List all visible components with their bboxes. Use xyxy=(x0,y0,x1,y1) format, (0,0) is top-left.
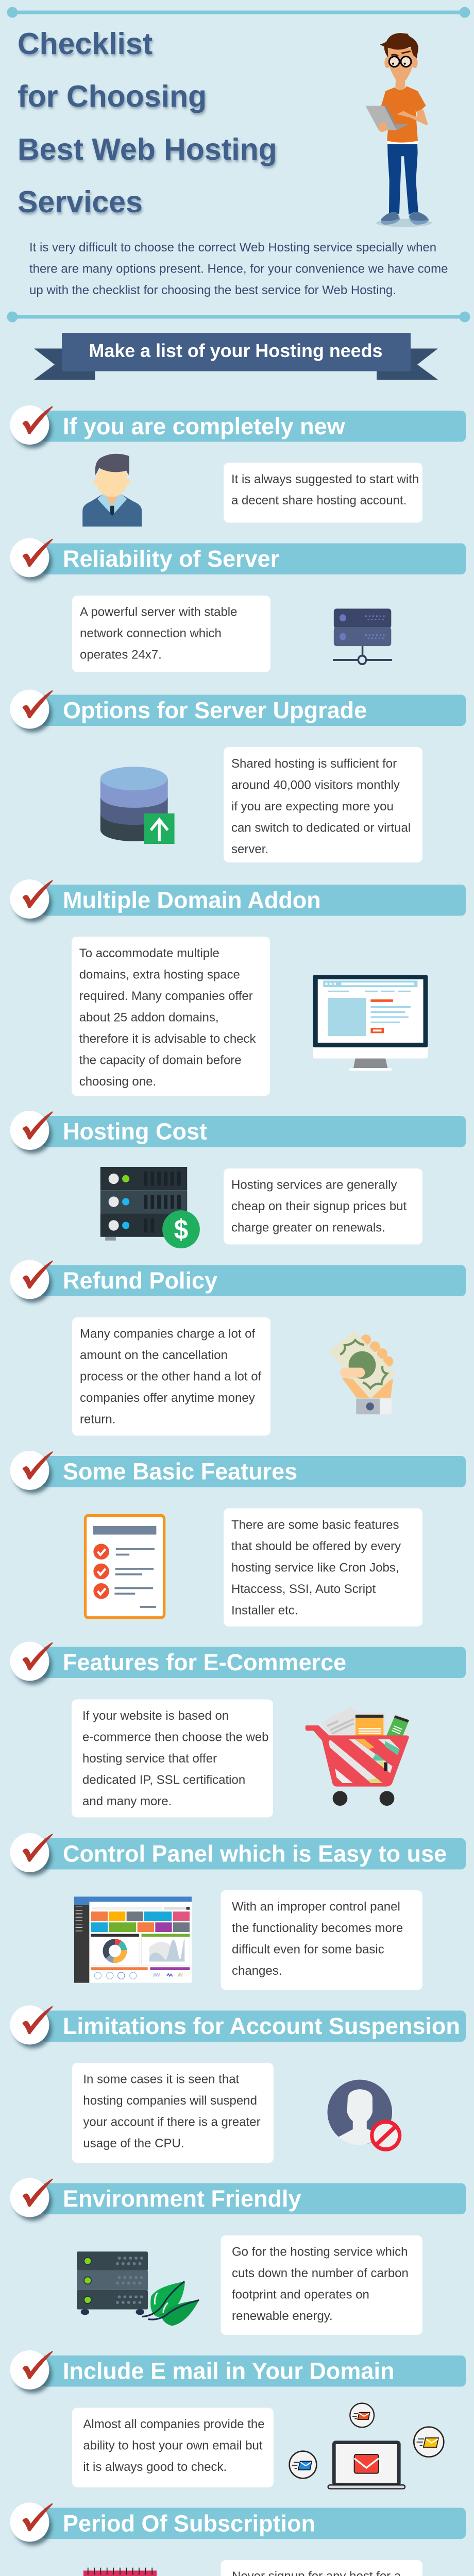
card: email: it is always good to check. xyxy=(83,2460,227,2474)
card: environment: Go for the hosting service which xyxy=(232,2245,408,2259)
icon: dashboard screenshot xyxy=(74,1896,192,1983)
card: suspension: usage of the CPU. xyxy=(83,2137,184,2150)
card: upgrade xyxy=(224,747,422,862)
card: domains: domains, extra hosting space xyxy=(79,968,240,982)
section 13 header: Period Of Subscription xyxy=(63,2510,315,2537)
intro paragraph: up with the checklist for choosing the best service for Web Hosting. xyxy=(29,283,396,297)
card: refund: Many companies charge a lot of xyxy=(80,1327,256,1341)
icon: server with dollar: $ xyxy=(174,1214,188,1245)
card: email xyxy=(72,2408,274,2487)
card: cost xyxy=(224,1168,422,1245)
card: email: Almost all companies provide the xyxy=(83,2417,265,2431)
section 2 header: Reliability of Server xyxy=(63,546,279,572)
card: suspension: your account if there is a greater xyxy=(83,2115,261,2129)
title: Best Web Hosting xyxy=(18,132,277,166)
icon: hand with money xyxy=(329,1331,396,1414)
card: environment: renewable energy. xyxy=(232,2309,333,2323)
section 8 header xyxy=(10,1641,466,1685)
card: domains: To accommodate multiple xyxy=(79,946,219,960)
card: suspension: In some cases it is seen that xyxy=(83,2072,240,2087)
icon: server with dollar xyxy=(100,1167,200,1248)
card: refund: process or the other hand a lot of xyxy=(80,1369,262,1384)
card: domains: about 25 addon domains, xyxy=(79,1011,219,1024)
card: cost: cheap on their signup prices but xyxy=(231,1199,407,1213)
section 5 header: Hosting Cost xyxy=(63,1118,207,1145)
card: upgrade: Shared hosting is sufficient for xyxy=(231,757,397,771)
section 10 header: Limitations for Account Suspension xyxy=(63,2013,460,2039)
section 3 header: Options for Server Upgrade xyxy=(63,697,367,723)
card: e-commerce: If your website is based on xyxy=(82,1709,229,1723)
divider rule xyxy=(7,311,470,323)
title: Checklist xyxy=(18,27,153,61)
card: new: a decent share hosting account. xyxy=(231,494,407,507)
intro paragraph: It is very difficult to choose the correct Web Hosting service specially when xyxy=(29,241,436,255)
card: cost: charge greater on renewals. xyxy=(231,1221,385,1234)
icon: website monitor xyxy=(313,975,428,1071)
icon: network server xyxy=(333,608,392,664)
card: reliability: network connection which xyxy=(80,626,222,640)
section 12 header: Include E mail in Your Domain xyxy=(63,2358,394,2384)
illustration: developer with laptop xyxy=(365,33,432,227)
card: cost: Hosting services are generally xyxy=(231,1178,397,1192)
section 7 header: Some Basic Features xyxy=(63,1458,297,1485)
icon: green server with leaves xyxy=(77,2251,199,2326)
card: basic features xyxy=(224,1509,422,1626)
icon: suspended user xyxy=(328,2080,400,2149)
ribbon banner xyxy=(34,333,438,380)
section 4 header: Multiple Domain Addon xyxy=(63,887,321,913)
card: domains xyxy=(72,937,270,1096)
section 6 header xyxy=(10,1260,466,1302)
section 13 header xyxy=(10,2503,466,2545)
card: reliability: A powerful server with stable xyxy=(80,605,237,619)
icon: business person xyxy=(82,454,142,527)
icon: shopping cart xyxy=(306,1707,410,1806)
card: basic features: Installer etc. xyxy=(231,1603,298,1618)
section 7 header xyxy=(10,1451,466,1494)
card: environment xyxy=(221,2235,422,2335)
intro paragraph: there are many options present. Hence, for your convenience we have come xyxy=(29,262,448,276)
top rule xyxy=(7,7,470,18)
card: domains: required. Many companies offer xyxy=(79,989,253,1003)
title xyxy=(18,27,277,219)
card: upgrade: can switch to dedicated or virtual xyxy=(231,821,411,835)
card: subscription xyxy=(221,2560,422,2576)
section 9 header: Control Panel which is Easy to use xyxy=(63,1840,447,1867)
intro paragraph xyxy=(29,241,448,297)
section 12 header xyxy=(10,2350,466,2393)
card: suspension xyxy=(72,2063,274,2163)
card: reliability xyxy=(72,596,270,672)
section 6 header: Refund Policy xyxy=(63,1267,217,1294)
card: refund xyxy=(72,1317,270,1435)
card: basic features: There are some basic features xyxy=(231,1518,399,1532)
card: control panel: difficult even for some basic xyxy=(232,1942,384,1957)
section 8 header: Features for E-Commerce xyxy=(63,1649,346,1675)
card: basic features: that should be offered by every xyxy=(231,1539,401,1553)
card: upgrade: around 40,000 visitors monthly xyxy=(231,778,400,792)
card: domains: the capacity of domain before xyxy=(79,1053,242,1067)
card: environment: cuts down the number of carbon xyxy=(232,2266,409,2280)
section 4 header xyxy=(10,879,466,922)
section 5 header xyxy=(10,1111,466,1154)
card: new: It is always suggested to start with xyxy=(231,472,419,486)
card: basic features: Htaccess, SSI, Auto Script xyxy=(231,1582,376,1596)
section 10 header xyxy=(10,2005,466,2048)
icon: laptop and email badges xyxy=(290,2403,444,2489)
card: refund: companies offer anytime money xyxy=(80,1391,255,1405)
card: control panel: the functionality becomes more xyxy=(232,1921,403,1935)
card: control panel: changes. xyxy=(232,1964,282,1978)
card: refund: return. xyxy=(80,1413,115,1426)
card: e-commerce xyxy=(72,1699,273,1818)
icon: database upgrade xyxy=(100,767,175,844)
card: domains: therefore it is advisable to check xyxy=(79,1032,257,1046)
card: control panel xyxy=(221,1890,422,1990)
icon: checklist document xyxy=(85,1516,164,1618)
card: domains: choosing one. xyxy=(79,1075,156,1089)
card: email: ability to host your own email but xyxy=(83,2439,263,2452)
card: control panel: With an improper control panel xyxy=(232,1900,400,1913)
section 1 header xyxy=(10,405,466,448)
ribbon banner: Make a list of your Hosting needs xyxy=(89,340,382,361)
section 9 header xyxy=(10,1833,466,1876)
section 2 header xyxy=(10,538,466,581)
section 1 header: If you are completely new xyxy=(63,413,346,439)
card: upgrade: server. xyxy=(231,842,268,856)
card: reliability: operates 24x7. xyxy=(80,648,162,662)
section 11 header xyxy=(10,2178,466,2221)
card: e-commerce: e-commerce then choose the web xyxy=(82,1730,269,1744)
card: environment: footprint and operates on xyxy=(232,2287,369,2302)
card: upgrade: if you are expecting more you xyxy=(231,800,394,814)
title: for Choosing xyxy=(18,79,207,113)
card: basic features: hosting service like Cron Jobs, xyxy=(231,1561,399,1574)
section 3 header xyxy=(10,689,466,733)
title: Services xyxy=(18,185,143,219)
card: refund: amount on the cancellation xyxy=(80,1348,228,1362)
card: e-commerce: hosting service that offer xyxy=(82,1752,217,1766)
card: e-commerce: dedicated IP, SSL certification xyxy=(82,1773,245,1787)
section 11 header: Environment Friendly xyxy=(63,2185,301,2212)
icon: calendar and clock xyxy=(83,2568,183,2576)
card: e-commerce: and many more. xyxy=(82,1794,172,1808)
card: new xyxy=(224,463,422,522)
card: suspension: hosting companies will suspend xyxy=(83,2094,257,2108)
